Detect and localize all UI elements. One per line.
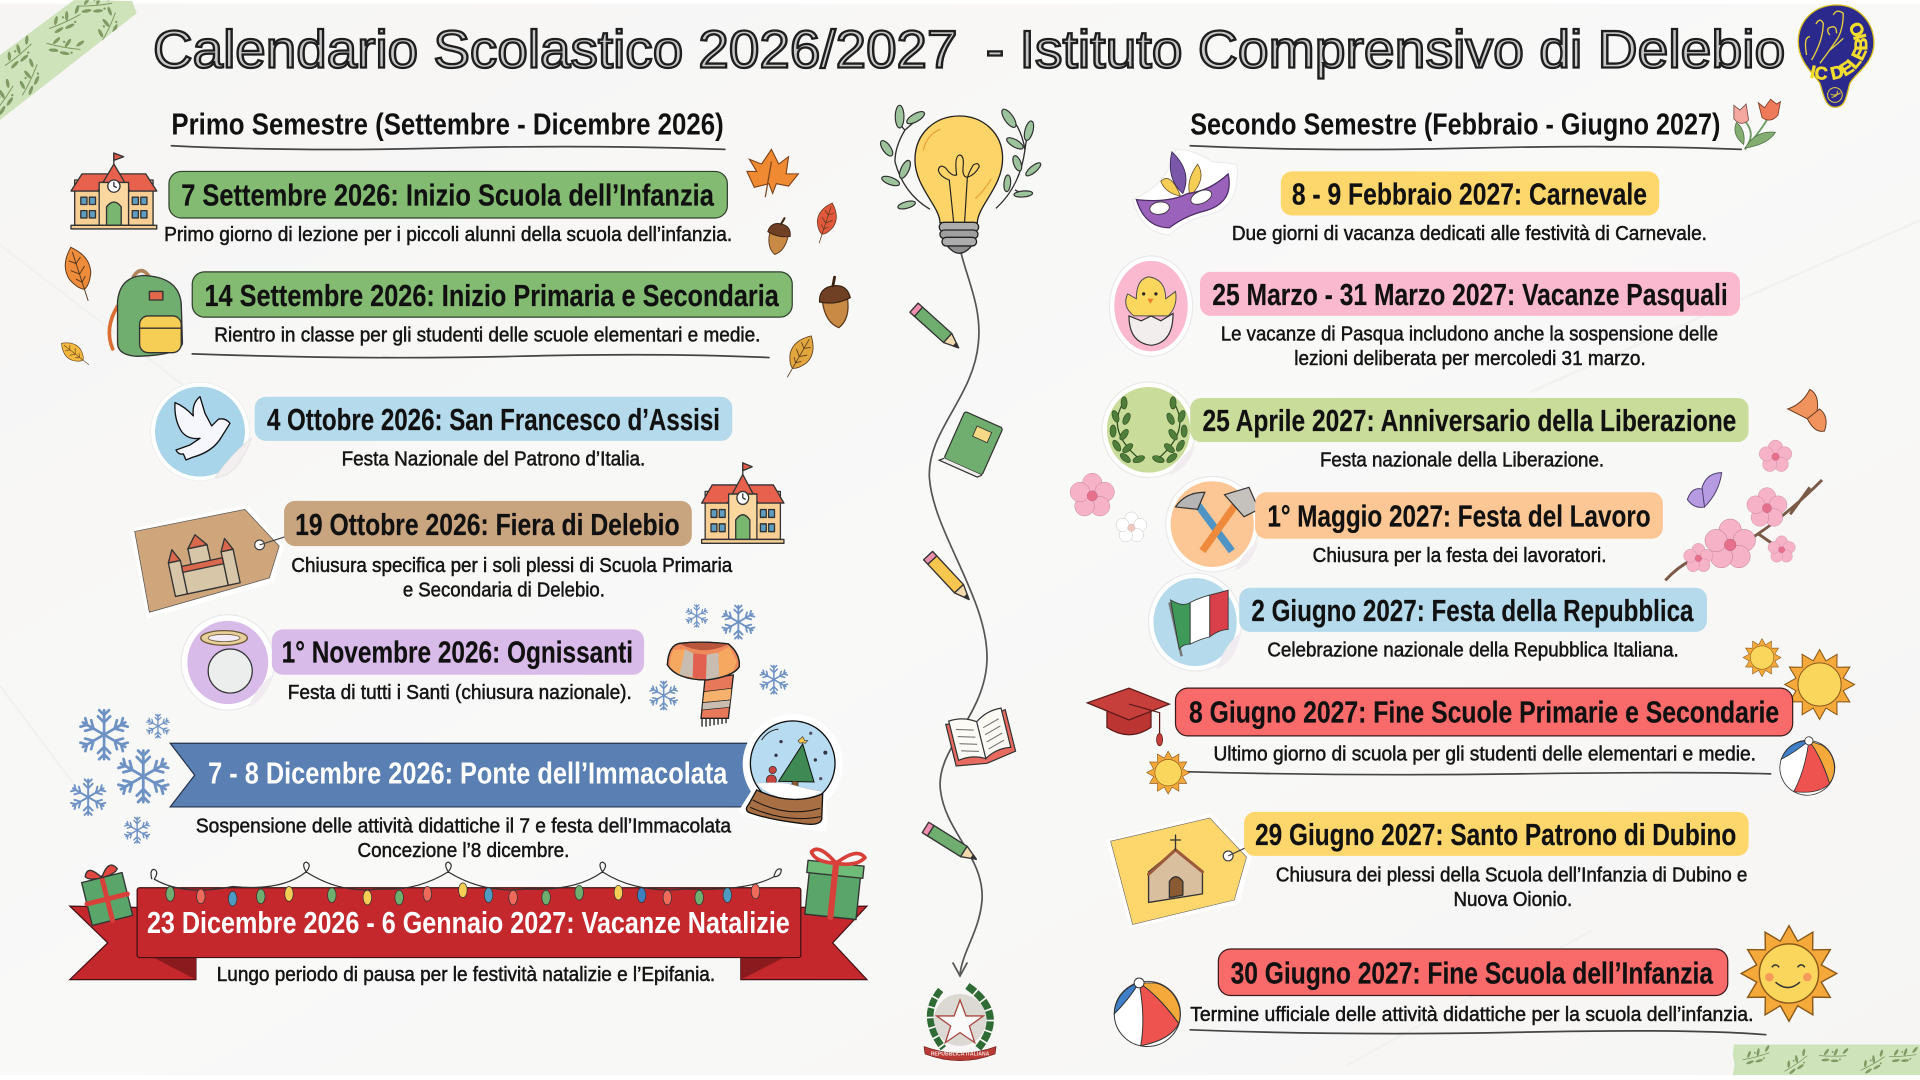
sticker: Italian flag [1149,573,1242,671]
sticker: halo [181,615,274,710]
description: Celebrazione nazionale della Repubblica Italiana. [1267,639,1679,661]
description [196,816,732,862]
pill: 25 Aprile [1190,398,1749,442]
central timeline path with arrow [929,253,987,976]
description: Festa di tutti i Santi (chiusura nazionale). [288,682,632,704]
sticker: hammer tools [1166,476,1259,572]
icon: tulips [1734,99,1780,149]
description: Due giorni di vacanza dedicati alle festività di Carnevale. [1232,223,1707,245]
pill: 1 Novembre: 1° Novembre 2026: Ognissanti [282,635,633,669]
description: Rientro in classe per gli studenti delle scuole elementari e medie. [214,325,760,347]
icon: school [71,153,157,229]
event: 19 Ottobre [130,501,733,618]
pill: 4 Ottobre [255,397,732,441]
event: 29 Giugno [1106,812,1749,928]
string of lights [151,862,781,906]
sticker: laurel wreath [1102,382,1195,478]
pill: 14 Settembre: 14 Settembre 2026: Inizio Primaria e Secondaria [204,279,780,313]
event: 7 Settembre [71,153,732,246]
event: 8 Giugno [1087,688,1793,765]
title: Calendario Scolastico 2026/2027 [153,20,958,79]
pill: 1 Maggio [1255,492,1663,539]
description [291,555,733,601]
pill: 8-9 Febbraio: 8 - 9 Febbraio 2027: Carnevale [1292,177,1647,211]
icon: cherry blossom branch [1665,440,1822,580]
event: 25 Marzo [1109,256,1740,370]
icon: small sun [1743,639,1781,677]
event: 1 Novembre [181,615,644,710]
icon: light bulb with branches [878,105,1043,253]
description: Primo giorno di lezione per i piccoli alunni della scuola dell’infanzia. [164,224,732,246]
heading: first semester: Primo Semestre (Settembre - Dicembre 2026) [171,108,724,142]
event: 2 Giugno [1149,573,1707,671]
logo: Istituto Comprensivo di Delebio: IC DELEBIO [1810,22,1868,80]
title [153,20,1785,79]
pill: 29 Giugno: 29 Giugno 2027: Santo Patrono di Dubino [1255,818,1736,852]
pill: 25 Marzo [1200,272,1740,316]
icon: small acorn [763,215,794,257]
event: 4 Ottobre [151,382,732,481]
logo: Istituto Comprensivo di Delebio [1798,4,1875,108]
tag: church [1106,813,1251,928]
event: 8-9 Febbraio [1133,149,1707,245]
event: 25 Aprile [1102,382,1749,478]
description [1276,865,1747,911]
description: Festa Nazionale del Patrono d’Italia. [342,448,645,470]
ribbon: Immacolata [170,743,754,807]
description: Chiusura per la festa dei lavoratori. [1313,545,1607,567]
description [1221,323,1718,370]
icon: green notebook [939,410,1003,479]
icon: beach ball right [1773,731,1843,802]
pill: 14 Settembre [192,272,792,317]
title: - Istituto Comprensivo di Delebio [986,20,1785,79]
icon: small yellow leaf [57,337,94,371]
description: Chiusura specifica per i soli plessi di Scuola Primaria [291,555,733,577]
sticker: dove [151,382,252,481]
pill: 19 Ottobre [284,501,692,546]
pill: 7 Settembre: 7 Settembre 2026: Inizio Scuola dell’Infanzia [181,179,715,213]
pill: 30 Giugno [1218,949,1728,996]
description: Festa nazionale della Liberazione. [1320,450,1604,472]
pill: 30 Giugno: 30 Giugno 2027: Fine Scuola dell’Infanzia [1231,956,1714,990]
icon: large gift [802,848,865,920]
icon: Italian Republic emblem: REPUBBLICA ITALIANA [931,1051,990,1057]
icon: large acorn [816,275,854,330]
icon: green pencil lower [922,822,980,864]
icon: scarf [667,642,739,727]
description: Termine ufficiale delle attività didattiche per la scuola dell’infanzia. [1190,1004,1753,1026]
icon: orange butterfly [1788,389,1826,431]
icon: beach ball bottom [1114,978,1180,1046]
icon: open book [945,707,1017,771]
pill: 1 Maggio: 1° Maggio 2027: Festa del Lavoro [1267,500,1651,534]
icon: carnival mask [1133,149,1237,235]
pill: 4 Ottobre: 4 Ottobre 2026: San Francesco d’Assisi [267,403,720,437]
banner tails [70,906,867,980]
washi tape bottom right [1733,1041,1920,1076]
heading: second semester: Secondo Semestre (Febbraio - Giugno 2027) [1190,108,1720,142]
description: Chiusura dei plessi della Scuola dell’Infanzia di Dubino e [1276,865,1747,887]
icon: green pencil [910,303,963,352]
event: 14 Settembre [109,271,792,356]
description: Nuova Oionio. [1453,889,1572,911]
description: Sospensione delle attività didattiche il 7 e festa dell’Immacolata [196,816,732,838]
ribbon: Immacolata: 7 - 8 Dicembre 2026: Ponte dell’Immacolata [208,757,728,791]
pill: 8 Giugno: 8 Giugno 2027: Fine Scuole Primarie e Secondarie [1189,695,1779,729]
icon: snow globe [739,714,843,832]
event: 23 Dicembre [70,862,867,986]
icon: red leaf [810,200,841,246]
pill: 7 Settembre [169,171,727,218]
description: Le vacanze di Pasqua includono anche la sospensione delle [1221,323,1718,345]
icon: maple leaf [747,149,798,197]
pill: 2 Giugno: 2 Giugno 2027: Festa della Repubblica [1251,594,1694,628]
icon: brown leaf [778,331,820,382]
icon: school tower [702,463,784,543]
icon: sun beside line [1147,751,1190,794]
description: Lungo periodo di pausa per le festività natalizie e l’Epifania. [217,964,715,986]
icon: purple butterfly [1687,473,1722,507]
icon: pink flowers left [1070,473,1147,542]
icon: yellow pencil [924,551,973,604]
washi tape top left [0,0,137,120]
pill: 25 Aprile: 25 Aprile 2027: Anniversario della Liberazione [1202,404,1736,438]
icon: large sun [1785,650,1854,719]
icon: smiling sun [1741,926,1837,1021]
pill: 8 Giugno [1176,688,1793,736]
icon: orange oak leaf [59,244,100,305]
icons: winter snowflakes [71,605,788,843]
ribbon: Natale [137,888,801,958]
description: lezioni deliberata per mercoledi 31 marzo. [1294,348,1646,370]
pill: 1 Novembre [272,629,644,675]
ribbon: Natale: 23 Dicembre 2026 - 6 Gennaio 2027: Vacanze Natalizie [147,906,790,940]
pill: 2 Giugno [1239,588,1707,632]
pill: 25 Marzo: 25 Marzo - 31 Marzo 2027: Vacanze Pasquali [1212,278,1728,312]
pill: 29 Giugno [1244,812,1749,856]
event: 1 Maggio [1166,476,1663,572]
description: Concezione l’8 dicembre. [358,840,569,862]
event: 30 Giugno [1190,949,1753,1026]
icon: backpack [109,271,182,356]
pill: 19 Ottobre: 19 Ottobre 2026: Fiera di Delebio [295,508,680,542]
event: 7-8 Dicembre [170,743,754,862]
icon: graduation cap [1087,688,1169,746]
icon: Italian Republic emblem [924,986,996,1061]
tag: Delebio castle [130,504,287,618]
description: Ultimo giorno di scuola per gli studenti delle elementari e medie. [1213,743,1756,765]
sticker: chick in egg [1109,256,1193,356]
description: e Secondaria di Delebio. [403,579,605,601]
pill: 8-9 Febbraio [1281,171,1659,216]
icon: small gift [79,863,133,925]
